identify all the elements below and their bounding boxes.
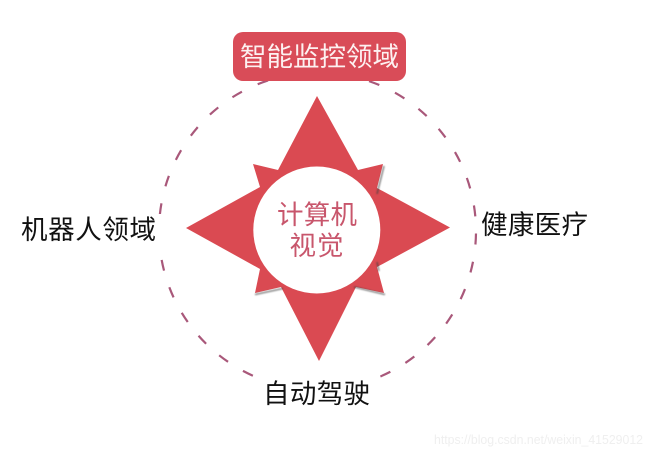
compass star xyxy=(186,96,450,361)
watermark: https://blog.csdn.net/weixin_41529012 xyxy=(434,433,643,447)
dashed circle ring xyxy=(159,72,476,390)
centre label line 1: 计算机 xyxy=(277,200,357,230)
label: healthcare: 健康医疗 xyxy=(481,210,588,240)
label: smart surveillance: 智能监控领域 xyxy=(240,42,399,72)
top label pill xyxy=(233,32,406,81)
centre circle xyxy=(253,166,380,294)
label: autonomous driving: 自动驾驶 xyxy=(263,379,370,409)
centre label line 2: 视觉 xyxy=(290,231,344,261)
label: robotics: 机器人领域 xyxy=(21,215,156,245)
spike shadows xyxy=(255,166,385,294)
